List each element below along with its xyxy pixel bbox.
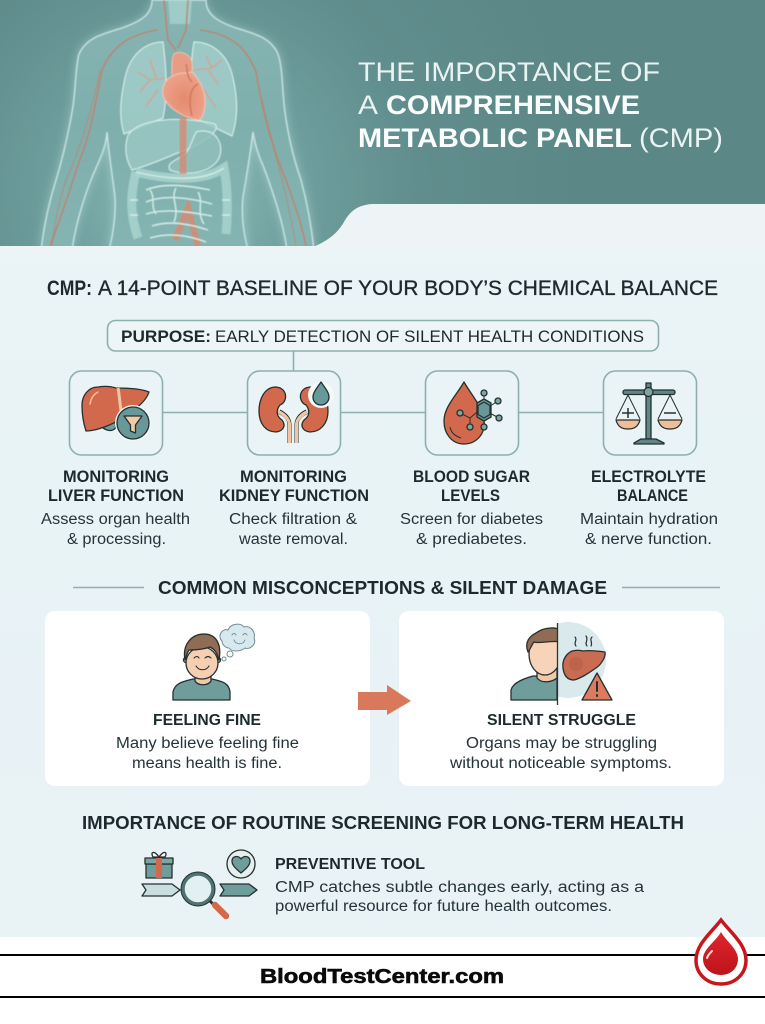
title: (CMP) xyxy=(639,123,723,153)
icon: timeline with gift, magnifier and heart xyxy=(142,850,257,916)
icon: kidneys with droplet xyxy=(248,371,340,455)
panel: liver function: & processing. xyxy=(67,531,166,548)
title: COMPREHENSIVE xyxy=(386,90,640,120)
panel: kidney function: KIDNEY FUNCTION xyxy=(219,487,369,505)
vessels xyxy=(50,0,306,246)
main heading: A 14-POINT BASELINE OF YOUR BODY’S CHEMICAL BALANCE xyxy=(98,277,718,300)
title: A xyxy=(358,90,378,120)
liver and stomach xyxy=(126,119,216,170)
description: Maintain hydration xyxy=(580,511,718,528)
purpose box: PURPOSE: xyxy=(121,327,211,346)
icon: liver with filter xyxy=(70,371,162,455)
preventive tool text: PREVENTIVE TOOL xyxy=(275,856,425,873)
purpose box xyxy=(108,320,658,351)
icon: balance scales xyxy=(604,371,696,455)
panel: blood sugar: & prediabetes. xyxy=(416,531,527,548)
icon: person with struggling liver and warning xyxy=(511,622,612,705)
heart xyxy=(172,52,192,80)
header curved light panel xyxy=(313,204,765,247)
main heading: CMP: xyxy=(47,277,92,300)
panel: liver function: LIVER FUNCTION xyxy=(48,487,184,505)
label: ELECTROLYTE xyxy=(591,468,706,486)
footer xyxy=(0,920,765,1024)
label: MONITORING xyxy=(63,468,169,486)
anatomy illustration: translucent torso xyxy=(41,0,314,250)
panel: blood sugar xyxy=(400,371,543,548)
description: Check filtration & xyxy=(229,511,358,528)
panel: feeling fine: means health is fine. xyxy=(132,755,282,772)
panel: electrolyte balance: & nerve function. xyxy=(585,531,712,548)
icon: smiling person with thought bubble xyxy=(173,624,255,700)
card body: Many believe feeling fine xyxy=(116,735,299,752)
title: METABOLIC PANEL xyxy=(358,123,632,153)
card title: SILENT STRUGGLE xyxy=(487,712,636,729)
lungs xyxy=(121,42,166,134)
description: Assess organ health xyxy=(41,511,190,528)
footer website name: BloodTestCenter.com xyxy=(260,966,504,988)
icon: blood drop with molecule xyxy=(426,371,518,455)
card body: Organs may be struggling xyxy=(466,735,657,752)
card title: FEELING FINE xyxy=(153,712,261,729)
description: Screen for diabetes xyxy=(400,511,543,528)
section heading: routine screening: IMPORTANCE OF ROUTINE SCREENING FOR LONG-TERM HEALTH xyxy=(82,812,684,833)
panel: electrolyte balance xyxy=(580,371,718,548)
preventive tool text: CMP catches subtle changes early, acting as a xyxy=(275,879,644,896)
panel: kidney function: waste removal. xyxy=(238,531,348,548)
title: THE IMPORTANCE OF xyxy=(358,57,660,87)
intestines xyxy=(130,168,230,242)
connector lines xyxy=(162,351,603,412)
label: BLOOD SUGAR xyxy=(413,468,530,486)
central vessel xyxy=(175,117,198,246)
purpose box: EARLY DETECTION OF SILENT HEALTH CONDITIONS xyxy=(215,327,644,346)
panel: blood sugar: LEVELS xyxy=(441,487,500,505)
panel: kidney function xyxy=(219,371,369,548)
section heading: misconceptions: COMMON MISCONCEPTIONS & SILENT DAMAGE xyxy=(158,577,607,598)
label: MONITORING xyxy=(240,468,347,486)
panel: feeling fine xyxy=(45,611,370,786)
icon: blood drop logo xyxy=(696,920,746,984)
panel: silent struggle xyxy=(399,611,724,786)
bronchi xyxy=(138,56,222,108)
panel: silent struggle: without noticeable symptoms. xyxy=(449,755,672,772)
neck xyxy=(168,0,192,24)
arrow between cards xyxy=(358,685,411,715)
preventive tool text: powerful resource for future health outcomes. xyxy=(275,898,612,915)
panel: electrolyte balance: BALANCE xyxy=(617,487,688,505)
preventive tool text xyxy=(275,856,644,915)
title xyxy=(358,57,723,153)
panel: liver function xyxy=(41,371,190,548)
header banner xyxy=(0,0,765,250)
